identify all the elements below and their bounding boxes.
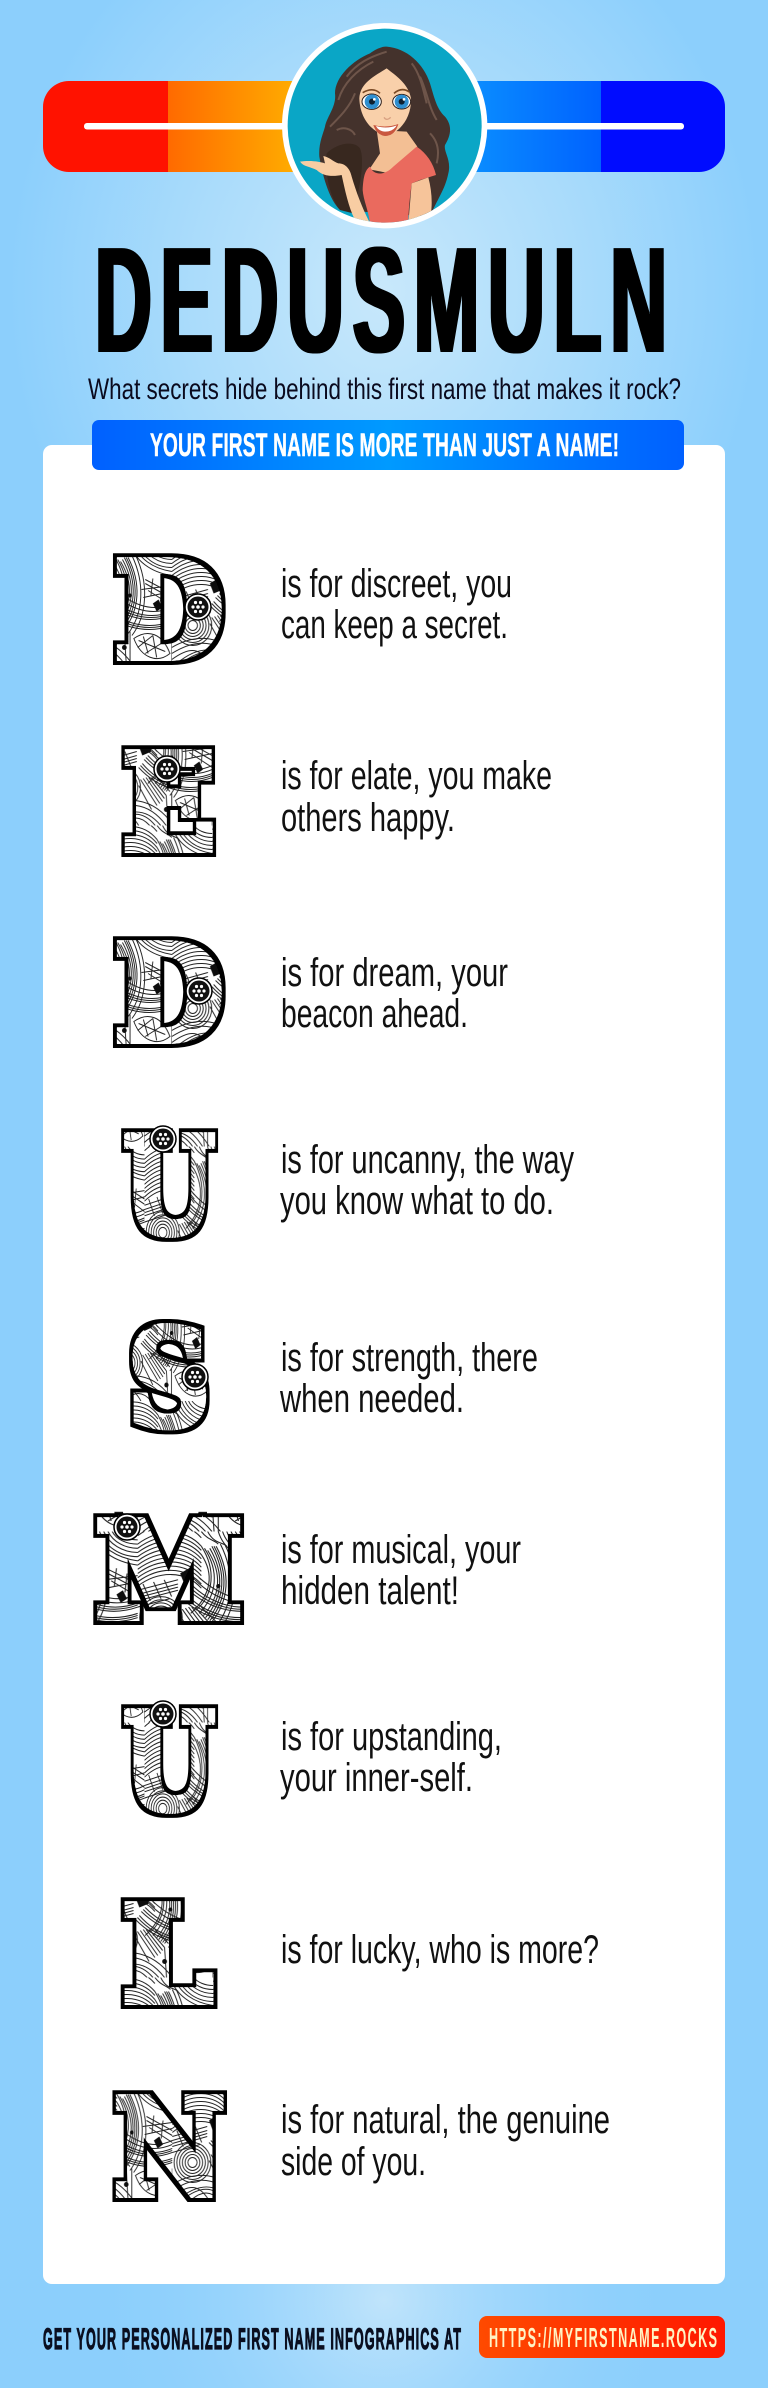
text: natural: is for natural, the genuine <box>281 2098 610 2142</box>
text: upstanding: is for upstanding, <box>281 1715 502 1759</box>
row: U uncanny <box>124 1109 574 1263</box>
text: uncanny: you know what to do. <box>280 1179 554 1223</box>
letter D: D <box>115 534 223 687</box>
row: S strength <box>129 1303 538 1455</box>
text: elate <box>281 754 552 840</box>
text: strength: is for strength, there <box>281 1336 538 1380</box>
text: strength <box>279 1336 538 1421</box>
row: N natural <box>115 2073 610 2225</box>
text: musical: hidden talent! <box>281 1569 459 1613</box>
letter U: U <box>124 1685 214 1839</box>
row: D dream <box>115 917 508 1070</box>
text: upstanding <box>280 1715 502 1800</box>
text: discreet: is for discreet, you <box>281 562 512 606</box>
banner <box>92 420 684 470</box>
letter D: D <box>115 917 223 1070</box>
header colour bar <box>43 81 725 172</box>
text: strength: when needed. <box>279 1377 464 1421</box>
letter N: N <box>115 2073 224 2225</box>
text: dream <box>281 951 508 1036</box>
footer url button: HTTPS://MYFIRSTNAME.ROCKS <box>489 2321 717 2353</box>
row: U upstanding <box>124 1685 502 1839</box>
banner: YOUR FIRST NAME IS MORE THAN JUST A NAME! <box>150 427 619 463</box>
text: discreet: can keep a secret. <box>281 603 508 647</box>
text: discreet <box>281 562 512 647</box>
text: uncanny <box>280 1138 574 1223</box>
letter M: M <box>96 1494 242 1647</box>
row: E elate <box>123 728 552 880</box>
letter S: S <box>129 1303 209 1455</box>
row: D discreet <box>115 534 512 687</box>
text: musical: is for musical, your <box>281 1528 521 1572</box>
icon: cartoon woman avatar <box>282 23 487 228</box>
text: elate: is for elate, you make <box>281 754 552 798</box>
title: DEDUSMULN <box>95 215 667 385</box>
text: lucky: is for lucky, who is more? <box>281 1928 599 1972</box>
row: L lucky <box>123 1880 599 2032</box>
panel: white content card <box>43 445 725 2284</box>
text: natural <box>281 2098 610 2184</box>
text: uncanny: is for uncanny, the way <box>281 1138 574 1182</box>
text: natural: side of you. <box>281 2140 426 2184</box>
text: dream: beacon ahead. <box>281 992 468 1036</box>
header white line <box>84 123 684 130</box>
letter U: U <box>124 1109 214 1263</box>
text: musical <box>281 1528 521 1613</box>
text: upstanding: your inner-self. <box>280 1756 473 1800</box>
footer call to action: GET YOUR PERSONALIZED FIRST NAME INFOGRAPHICS AT <box>43 2322 461 2356</box>
text: dream: is for dream, your <box>281 951 508 995</box>
letter E: E <box>123 728 215 880</box>
row: M musical <box>96 1494 521 1647</box>
letter L: L <box>123 1880 212 2032</box>
text: elate: others happy. <box>281 796 455 840</box>
